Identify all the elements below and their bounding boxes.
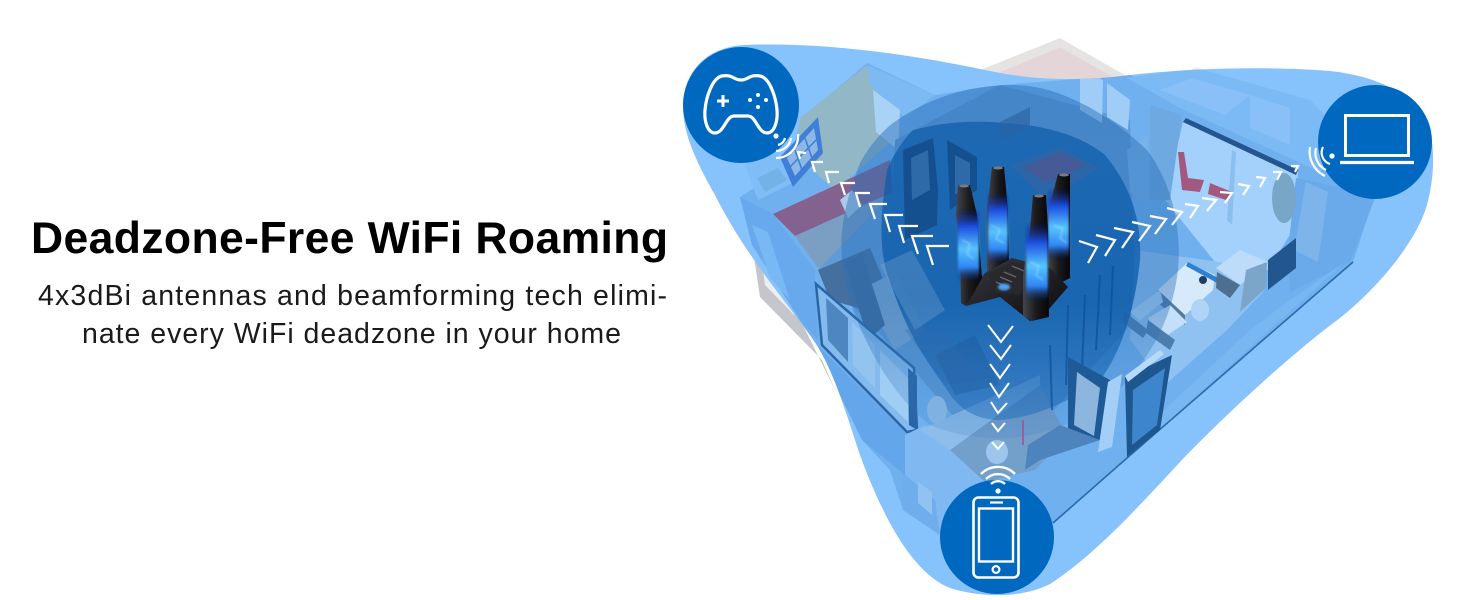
icon: smartphone badge [940,467,1054,594]
curtain and end wall [1290,178,1374,236]
left exterior wall [740,197,818,340]
lower left walls [818,346,907,475]
kitchen counter under ring [880,250,945,330]
windows of back bedroom [1080,78,1103,123]
TV poster [1268,238,1296,290]
lamp [1191,299,1209,321]
toilet [986,440,1008,464]
left terrace window [816,284,917,432]
water jar [927,396,947,424]
bed [1010,147,1100,200]
kitchen wall [773,160,893,236]
title: Deadzone-Free WiFi Roaming [31,214,668,263]
sofa blocks [1130,290,1163,320]
antenna caps [959,166,1069,198]
description text: nate every WiFi deadzone in your home [82,318,621,350]
plant [1272,173,1296,223]
building outside the coverage area [753,38,1212,392]
lounge floor [1130,250,1265,385]
wifi arcs: laptop [1310,147,1335,176]
coverage area blob [683,44,1433,595]
living room glass [1165,122,1298,270]
chevrons toward phone [988,325,1013,449]
front antennas [956,185,982,303]
back antennas [987,167,1009,272]
red chair [1178,152,1204,192]
outer coverage ring [841,85,1179,438]
right room upper wall [1128,70,1324,172]
cabinet door with window [1068,357,1110,440]
inner coverage ring [881,122,1140,420]
icon: laptop badge [1310,85,1432,199]
back left room [798,65,890,187]
bookshelf [780,117,823,187]
central rooms [818,85,1132,415]
chevrons toward game controller [798,152,949,265]
house base [740,63,1375,535]
router [956,166,1070,321]
light wall strip [1160,264,1343,427]
coffee table [1158,263,1215,315]
house floor plan [740,63,1375,535]
antenna pattern lines [1050,266,1113,410]
description text: 4x3dBi antennas and beamforming tech elimi- [38,280,667,312]
sofa [1216,250,1268,285]
wifi arcs: game controller [773,133,798,158]
bedroom doors [903,138,938,240]
wifi arcs: smartphone [981,467,1015,494]
house front wall line [1053,262,1353,523]
description text [38,280,667,350]
chevrons toward laptop [1079,166,1298,263]
back bedroom tv [1000,107,1030,140]
antenna sparks [962,225,1067,280]
red toothbrush [1022,420,1024,445]
icon: game controller badge [683,47,799,163]
bathroom [950,394,1061,482]
router base [961,258,1068,321]
front door [1125,355,1172,457]
